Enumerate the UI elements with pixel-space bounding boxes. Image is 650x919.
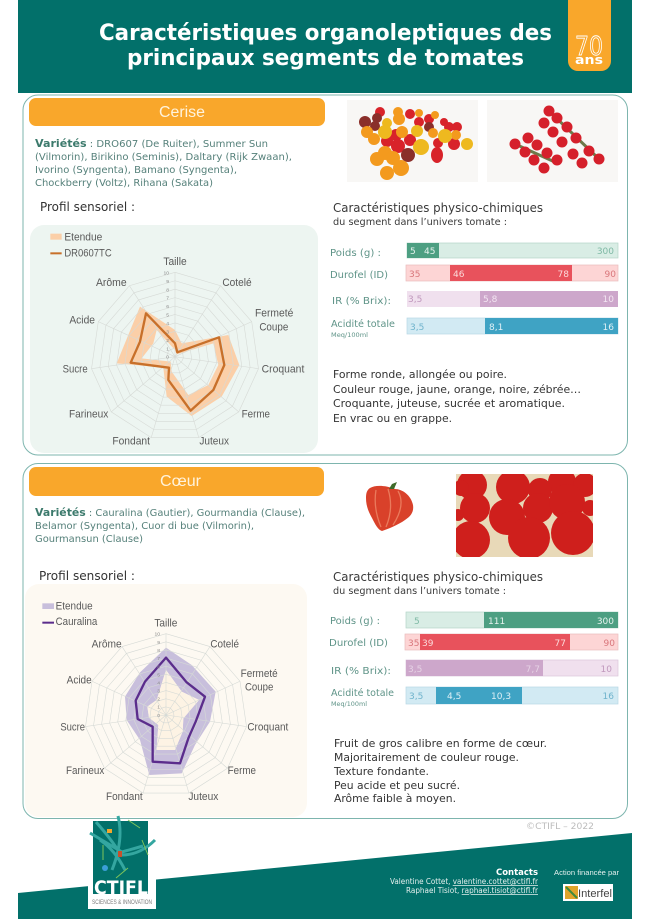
radar axis labels: Taille — [154, 618, 177, 630]
contacts — [390, 868, 539, 895]
description text: Couleur rouge, jaune, orange, noire, zébrée… — [333, 383, 581, 396]
radar axis labels: Juteux — [199, 435, 229, 447]
radar axis labels: Farineux — [69, 409, 109, 421]
bar: durofel: 39 — [422, 639, 434, 649]
description text: Forme ronde, allongée ou poire. — [333, 368, 507, 381]
radar scale ticks: 9 — [157, 640, 160, 646]
bar: acidite: 10,3 — [491, 692, 511, 702]
radar scale ticks: 0 — [157, 713, 160, 719]
radar scale ticks: 8 — [157, 648, 160, 654]
contacts: Raphael Tisiot, raphael.tisiot@ctifl.fr — [406, 886, 539, 895]
radar axis labels: Arôme — [92, 639, 122, 651]
varieties text: Ivorino (Syngenta), Bamano (Syngenta), — [35, 165, 237, 176]
radar scale ticks: 1 — [166, 346, 169, 352]
description text: En vrac ou en grappe. — [333, 412, 452, 425]
title: principaux segments de tomates — [127, 46, 524, 71]
bar: durofel: 35 — [408, 639, 419, 649]
radar scale ticks: 8 — [166, 287, 169, 293]
radar scale ticks: 1 — [157, 705, 160, 711]
radar scale ticks: 9 — [166, 279, 169, 285]
varieties text — [35, 506, 305, 545]
physico-chemical heading — [333, 200, 543, 228]
radar panel: coeur — [25, 584, 307, 817]
logo: CTIFL — [88, 816, 156, 909]
photo: mixed cherry tomatoes — [347, 100, 478, 182]
varieties text: Variétés : Cauralina (Gautier), Gourmandia (Clause), — [35, 506, 305, 519]
logo: CTIFL: SCIENCES & INNOVATION — [92, 900, 152, 906]
bar: poids: 300 — [597, 617, 614, 627]
radar scale ticks — [154, 632, 160, 719]
coeur heading pill — [29, 467, 324, 496]
radar scale ticks: 6 — [157, 664, 160, 670]
radar legend — [42, 601, 98, 628]
copyright: ©CTIFL – 2022 — [526, 822, 594, 832]
badge: 70 ans — [568, 0, 611, 71]
description text: Fruit de gros calibre en forme de cœur. — [334, 737, 547, 750]
bar: poids: Poids (g) : — [330, 248, 381, 259]
bar: durofel: 90 — [604, 639, 615, 649]
radar axis labels: Cotelé — [210, 639, 239, 651]
bar: IR brix — [332, 291, 618, 307]
bar: acidite — [331, 687, 618, 708]
bar: acidite: Meq/100ml — [331, 701, 367, 708]
varieties text: Chockberry (Voltz), Rihana (Sakata) — [35, 178, 213, 189]
bar: IR brix — [331, 660, 618, 677]
logo: Interfel: Interfel — [578, 888, 612, 900]
bar: durofel — [330, 265, 618, 281]
title — [99, 21, 552, 71]
radar scale ticks: 0 — [166, 355, 169, 361]
radar axis labels: Ferme — [228, 765, 256, 777]
contacts: Valentine Cottet, valentine.cottet@ctifl.fr — [390, 877, 539, 886]
contacts: Contacts — [496, 868, 538, 878]
physico-chemical heading: du segment dans l’univers tomate : — [333, 217, 507, 228]
bar: acidite: 3,5 — [409, 692, 423, 702]
bar: acidite: 4,5 — [447, 692, 461, 702]
radar inner area — [147, 670, 199, 750]
radar series line — [136, 658, 205, 763]
varieties text — [35, 137, 292, 189]
radar legend: Etendue — [64, 231, 102, 243]
bar: IR brix: 5,8 — [483, 295, 498, 305]
radar range band — [117, 307, 239, 416]
radar axis labels: Fermeté — [241, 668, 278, 680]
bar: IR brix: 10 — [601, 665, 612, 675]
radar scale ticks: 2 — [166, 338, 169, 344]
radar axis labels: Arôme — [96, 277, 127, 289]
bar: IR brix: 3,5 — [408, 665, 422, 675]
photo: cherry tomato trusses — [487, 100, 618, 182]
radar scale ticks: 10 — [163, 270, 169, 276]
radar axis labels: Fondant — [112, 435, 150, 447]
cerise heading pill: Cerise — [159, 104, 205, 121]
bar: durofel: 46 — [453, 270, 465, 280]
bar: acidite: 3,5 — [410, 323, 424, 333]
radar axis labels: Juteux — [188, 791, 219, 803]
bar: poids: 45 — [424, 247, 435, 257]
varieties text: Gourmansun (Clause) — [35, 534, 143, 545]
radar scale ticks: 5 — [166, 313, 169, 319]
bar: IR brix: IR (% Brix): — [331, 666, 391, 677]
logo: Interfel — [563, 884, 613, 901]
description text: Majoritairement de couleur rouge. — [334, 751, 519, 764]
badge: 70 ans: ans — [575, 53, 603, 67]
bar: durofel — [329, 634, 618, 650]
physico-chemical heading — [333, 569, 543, 597]
radar scale ticks: 7 — [166, 296, 169, 302]
bar: poids — [330, 243, 618, 259]
radar legend: Cauralina — [56, 616, 98, 628]
cerise heading pill — [29, 98, 325, 126]
radar scale ticks: 10 — [154, 632, 160, 638]
radar scale ticks: 7 — [157, 656, 160, 662]
radar web — [92, 272, 258, 438]
varieties text: (Vilmorin), Birikino (Seminis), Daltary (Rijk Zwaan), — [35, 152, 292, 163]
radar web — [85, 634, 247, 793]
physico-chemical heading: Caractéristiques physico-chimiques — [333, 569, 543, 584]
radar axis labels: Coupe — [245, 681, 273, 693]
bar: poids: Poids (g) : — [330, 616, 380, 627]
bar: poids: 111 — [488, 617, 505, 627]
radar axis labels — [60, 618, 288, 803]
radar axis labels: Acide — [69, 315, 95, 327]
description text: Croquante, juteuse, sucrée et aromatique. — [333, 397, 565, 410]
header band — [18, 0, 632, 93]
radar axis labels: Fermeté — [255, 308, 293, 320]
logo: CTIFL: CTIFL — [94, 878, 148, 899]
radar axis labels: Fondant — [106, 791, 143, 803]
radar scale ticks: 3 — [157, 689, 160, 695]
radar panel: cerise — [30, 225, 318, 453]
bar: durofel: 35 — [409, 270, 420, 280]
bar: poids: 5 — [414, 617, 420, 627]
radar legend — [50, 231, 112, 260]
radar scale ticks — [163, 270, 169, 361]
bar: poids: 5 — [410, 247, 416, 257]
footer band — [18, 833, 632, 919]
bar: acidite: Acidité totale — [331, 687, 394, 699]
radar scale ticks: 2 — [157, 697, 160, 703]
radar axis labels: Sucre — [60, 722, 85, 734]
panel: coeur — [23, 464, 628, 818]
panel: cerise — [23, 95, 628, 455]
radar axis labels: Acide — [67, 675, 92, 687]
physico-chemical heading: du segment dans l’univers tomate : — [333, 586, 506, 597]
funding credit: Action financée par — [554, 868, 619, 877]
radar series line — [131, 313, 224, 411]
radar axis labels: Coupe — [259, 322, 288, 334]
varieties text: Variétés : DRO607 (De Ruiter), Summer Sun — [35, 137, 268, 150]
radar scale ticks: 6 — [166, 304, 169, 310]
badge: 70 ans: 70 — [575, 32, 603, 62]
radar axis labels — [63, 256, 304, 447]
bar: durofel: 90 — [605, 270, 616, 280]
description text — [333, 368, 581, 425]
photo: heart tomatoes in straw — [456, 474, 593, 557]
radar axis labels: Ferme — [242, 409, 270, 421]
title: Caractéristiques organoleptiques des — [99, 21, 552, 46]
radar scale ticks: 3 — [166, 329, 169, 335]
bar: poids: 300 — [597, 247, 614, 257]
bar: acidite: 16 — [603, 692, 614, 702]
radar range band — [125, 648, 216, 775]
bar: poids — [330, 612, 618, 628]
sensory profile heading: Profil sensoriel : — [39, 568, 135, 583]
radar axis labels: Taille — [163, 256, 187, 268]
bar: IR brix: 10 — [603, 295, 614, 305]
bar: IR brix: IR (% Brix): — [332, 296, 391, 307]
bar: acidite — [331, 318, 618, 339]
description text: Peu acide et peu sucré. — [334, 779, 460, 792]
varieties text: Belamor (Syngenta), Cuor di bue (Vilmorin), — [35, 521, 254, 532]
radar scale ticks: 5 — [157, 672, 160, 678]
bar: IR brix: 3,5 — [408, 295, 422, 305]
bar: durofel: Durofel (ID) — [330, 270, 388, 281]
bar: acidite: 8,1 — [489, 323, 503, 333]
radar axis labels: Croquant — [247, 722, 288, 734]
description text — [333, 737, 547, 805]
radar axis labels: Croquant — [262, 364, 304, 376]
radar axis labels: Cotelé — [222, 277, 252, 289]
radar scale ticks: 4 — [166, 321, 169, 327]
radar axis labels: Sucre — [63, 364, 88, 376]
physico-chemical heading: Caractéristiques physico-chimiques — [333, 200, 543, 215]
bar: IR brix: 7,7 — [526, 665, 540, 675]
sensory profile heading: Profil sensoriel : — [40, 199, 135, 214]
description text: Texture fondante. — [333, 765, 429, 778]
photo: single heart tomato — [366, 482, 413, 531]
description text: Arôme faible à moyen. — [334, 792, 456, 805]
radar legend: Etendue — [56, 601, 93, 613]
bar: acidite: 16 — [603, 323, 614, 333]
bar: acidite: Meq/100ml — [331, 332, 368, 339]
radar scale ticks: 4 — [157, 680, 160, 686]
radar legend: DR0607TC — [64, 248, 112, 260]
bar: durofel: Durofel (ID) — [329, 638, 388, 649]
bar: durofel: 77 — [555, 639, 566, 649]
coeur heading pill: Cœur — [160, 473, 201, 490]
bar: acidite: Acidité totale — [331, 318, 395, 330]
radar axis labels: Farineux — [66, 765, 105, 777]
bar: durofel: 78 — [558, 270, 569, 280]
